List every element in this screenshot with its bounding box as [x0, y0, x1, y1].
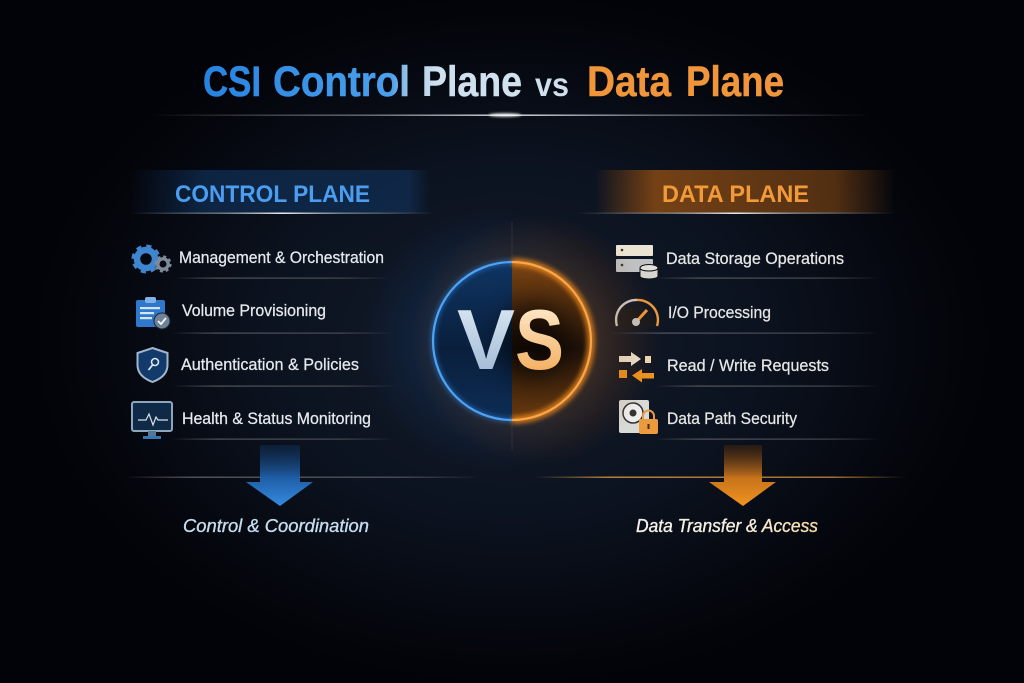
row text: data path: Data Path Security [667, 410, 798, 428]
title [203, 58, 784, 106]
arrow: data down [535, 445, 905, 506]
row text: health: Health & Status Monitoring [182, 410, 371, 428]
outcome: data: Data Transfer & Access [636, 515, 818, 536]
panel: data plane [535, 170, 905, 536]
title: Plane [422, 58, 522, 106]
icon: disk with padlock [619, 400, 658, 434]
panel: control plane [125, 170, 480, 536]
VS badge: S [515, 293, 564, 388]
row text: volume: Volume Provisioning [182, 302, 326, 320]
title: Plane [686, 58, 784, 106]
icon: monitor [132, 402, 172, 439]
row text: io: I/O Processing [668, 304, 771, 322]
control plane heading: CONTROL PLANE [175, 181, 370, 208]
icon: gears [134, 246, 170, 272]
icon: read write arrows [619, 352, 654, 382]
title: Data [587, 58, 672, 106]
icon: shield [138, 348, 168, 382]
row text: storage: Data Storage Operations [666, 250, 844, 268]
outcome: control: Control & Coordination [183, 515, 369, 536]
row text: authentication: Authentication & Policies [181, 356, 359, 374]
title: CSI [203, 58, 261, 106]
title: Control [273, 58, 410, 106]
data plane heading: DATA PLANE [662, 181, 809, 208]
arrow: control down [125, 445, 480, 506]
VS badge [360, 210, 660, 470]
title: vs [535, 66, 569, 103]
data plane heading [575, 170, 895, 214]
row text: management: Management & Orchestration [179, 249, 384, 267]
center divider [512, 222, 513, 450]
row text: read write: Read / Write Requests [667, 357, 829, 375]
icon: clipboard [136, 297, 170, 329]
icon: gauge [616, 300, 658, 327]
control plane heading [130, 170, 435, 214]
title divider [150, 113, 870, 117]
icon: server storage [616, 245, 658, 279]
VS badge: V [457, 293, 515, 388]
